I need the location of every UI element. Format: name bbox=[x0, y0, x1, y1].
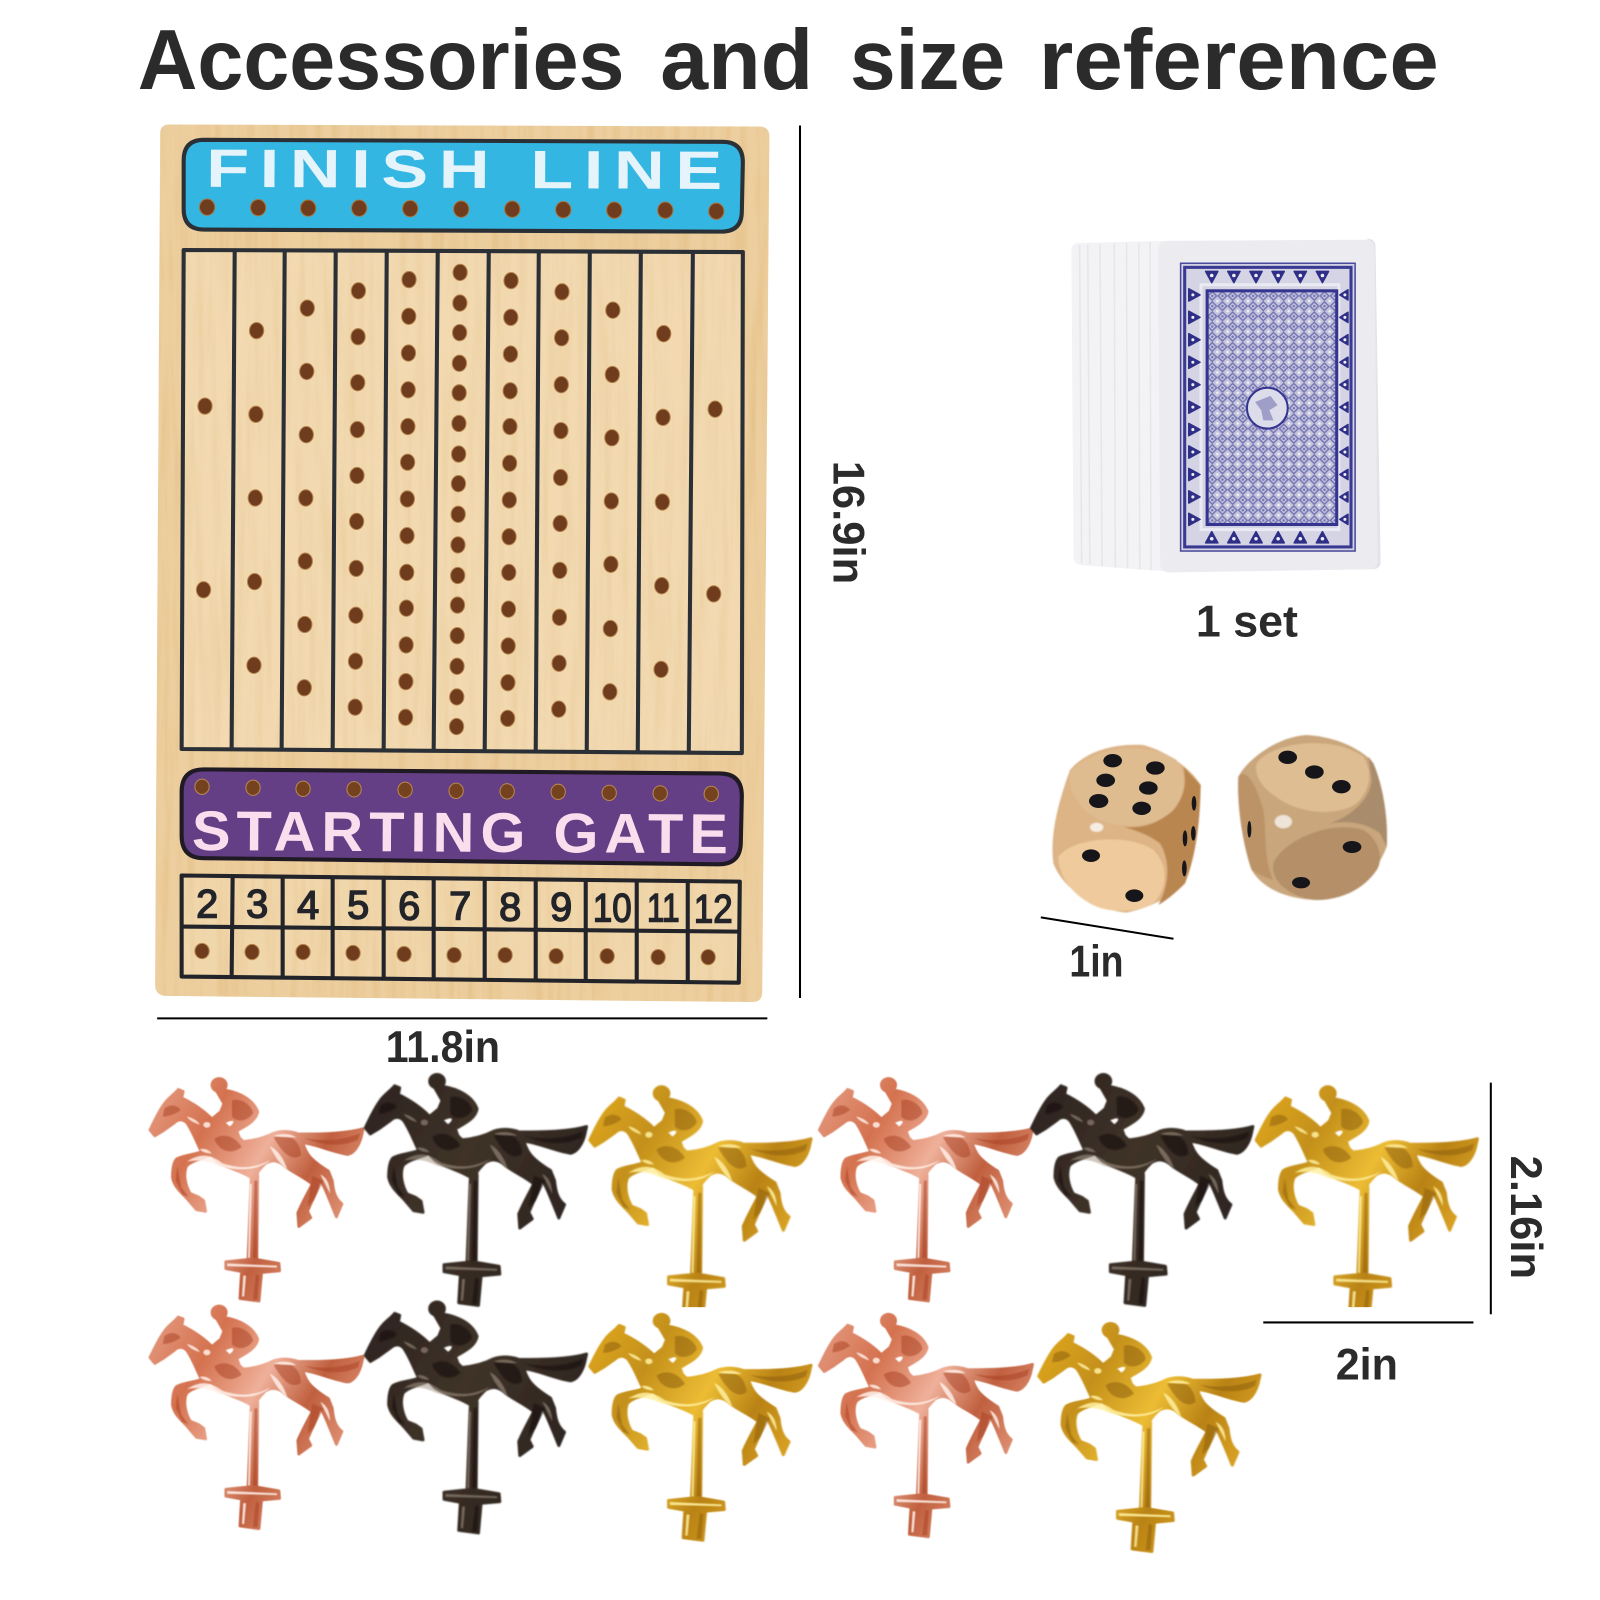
dice edge line bbox=[1041, 917, 1173, 939]
board wood base bbox=[155, 124, 769, 1002]
number table bbox=[182, 876, 740, 983]
card centre pattern bbox=[1207, 291, 1337, 524]
horse: dark row 1 #5 bbox=[1032, 1074, 1253, 1305]
table numbers: 7 bbox=[449, 884, 471, 928]
horse width label: 2in bbox=[1336, 1339, 1398, 1390]
table grid bbox=[182, 876, 740, 983]
track 2 holes bbox=[196, 398, 212, 598]
horse tokens bbox=[150, 1074, 1477, 1552]
board width line bbox=[157, 1017, 767, 1019]
title: Accessories bbox=[138, 12, 624, 108]
finish line banner bbox=[184, 138, 743, 232]
starting gate text: STARTING GATE bbox=[192, 800, 728, 866]
starting gate banner bbox=[182, 769, 742, 866]
horse height line bbox=[1490, 1083, 1492, 1314]
title: size bbox=[850, 12, 1005, 108]
horse: gold row 2 #3 bbox=[590, 1314, 811, 1540]
horse: dark row 1 #2 bbox=[365, 1074, 587, 1305]
table numbers: 8 bbox=[499, 885, 521, 929]
track 8 holes bbox=[500, 272, 518, 727]
track 4 holes bbox=[297, 300, 314, 696]
table numbers: 11 bbox=[647, 886, 680, 930]
side triangle centres bbox=[1193, 295, 1345, 522]
table numbers: 5 bbox=[347, 883, 369, 927]
table holes bbox=[195, 943, 715, 965]
horse: copper row 1 #1 bbox=[150, 1079, 363, 1301]
table numbers: 4 bbox=[297, 883, 319, 927]
dice size label: 1in bbox=[1069, 936, 1123, 987]
horse: copper row 2 #1 bbox=[150, 1306, 363, 1529]
triangle centres bbox=[1212, 276, 1327, 539]
track 6 holes bbox=[398, 271, 416, 726]
table numbers: 3 bbox=[246, 882, 268, 926]
horse height label: 2.16in bbox=[1501, 1156, 1552, 1279]
title bbox=[138, 12, 1439, 108]
horse: gold row 1 #6 bbox=[1256, 1087, 1477, 1318]
card border frame bbox=[1181, 263, 1355, 551]
card medallion bbox=[1247, 388, 1288, 429]
table numbers: 10 bbox=[593, 886, 632, 930]
starting gate holes bbox=[195, 779, 718, 802]
stacked card edges bbox=[1071, 239, 1381, 571]
horse: copper row 2 #4 bbox=[819, 1314, 1032, 1537]
table numbers bbox=[196, 882, 733, 931]
table numbers: 2 bbox=[196, 882, 218, 926]
table numbers: 9 bbox=[550, 885, 572, 929]
deck label: 1 set bbox=[1196, 596, 1298, 647]
border triangles bbox=[1189, 271, 1348, 543]
finish line text: FINISH LINE bbox=[206, 138, 722, 201]
horse: dark row 2 #2 bbox=[365, 1302, 587, 1533]
race tracks grid bbox=[182, 250, 743, 753]
panel: wooden race board bbox=[155, 124, 769, 1002]
track 10 holes bbox=[603, 302, 620, 700]
track 9 holes bbox=[552, 284, 569, 717]
table numbers: 12 bbox=[694, 887, 733, 931]
top card face bbox=[1158, 240, 1378, 572]
die: six and two bbox=[1052, 745, 1201, 913]
horse: gold row 1 #3 bbox=[590, 1087, 811, 1318]
dice bbox=[1052, 735, 1387, 913]
title: reference bbox=[1039, 12, 1439, 108]
track 11 holes bbox=[654, 326, 671, 678]
horse: gold row 2 #5 bbox=[1039, 1323, 1260, 1552]
board height label: 16.9in bbox=[824, 461, 875, 584]
title: and bbox=[660, 12, 813, 108]
track 12 holes bbox=[706, 401, 722, 602]
board width label: 11.8in bbox=[386, 1021, 500, 1072]
finish holes bbox=[199, 199, 724, 219]
track 3 holes bbox=[247, 322, 264, 673]
track 5 holes bbox=[348, 283, 366, 715]
board height line bbox=[799, 126, 801, 998]
track holes bbox=[195, 264, 723, 735]
table numbers: 6 bbox=[398, 884, 420, 928]
die: three and two bbox=[1238, 735, 1387, 900]
track 7 holes bbox=[449, 264, 467, 735]
playing card deck bbox=[1071, 239, 1381, 572]
horse width line bbox=[1263, 1321, 1473, 1323]
horse: copper row 1 #4 bbox=[819, 1079, 1032, 1301]
